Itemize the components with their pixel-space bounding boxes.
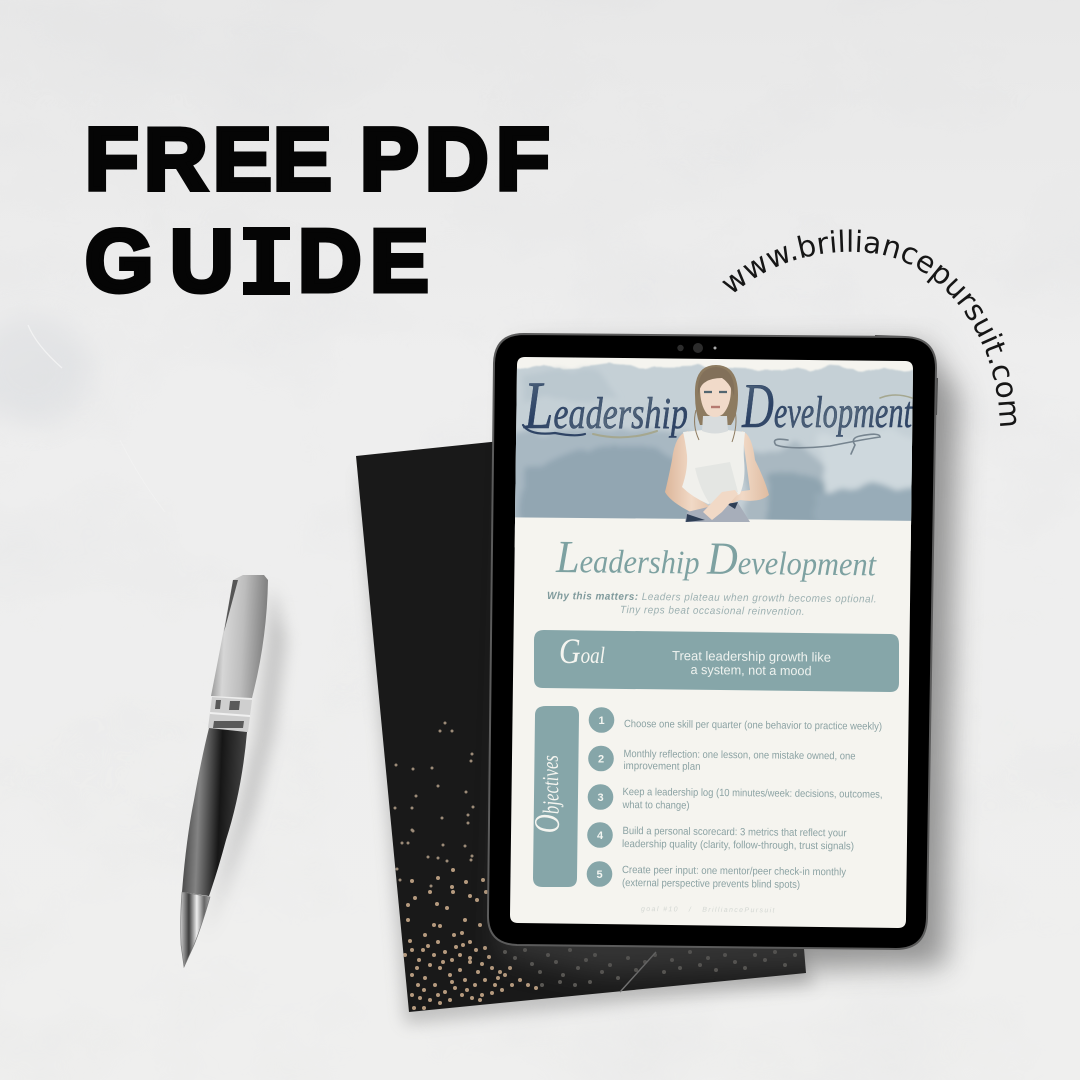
goal text: a system, not a mood xyxy=(690,662,812,678)
hair top xyxy=(698,367,734,396)
header title: Leadership: Leadership xyxy=(523,367,688,443)
curved website url: www.brilliancepursuit.com xyxy=(722,229,1016,426)
main title: Leadership Development xyxy=(555,531,877,585)
hair wisps xyxy=(695,410,736,442)
pen barrel xyxy=(182,728,247,896)
header flourishes xyxy=(523,395,912,454)
eyes and lips xyxy=(704,391,727,393)
why this matters text xyxy=(548,592,876,616)
black notebook xyxy=(356,414,815,1024)
objective 4 xyxy=(587,822,854,852)
goal label: Goal xyxy=(559,631,605,671)
goal text: Treat leadership growth like xyxy=(672,648,831,665)
tablet xyxy=(488,334,958,975)
objective 1: Choose one skill per quarter (one behavior to practice weekly) xyxy=(624,718,882,733)
objective 4: leadership quality (clarity, follow-through, trust signals) xyxy=(622,838,854,852)
hair back xyxy=(695,365,738,425)
goal text xyxy=(672,651,830,677)
objective 2: 2 xyxy=(598,754,604,766)
pen xyxy=(181,575,286,967)
tablet side buttons xyxy=(875,335,938,415)
illustration: woman xyxy=(665,365,769,522)
pen cap xyxy=(211,575,268,698)
objective 4: Build a personal scorecard: 3 metrics that reflect your xyxy=(622,825,847,839)
objectives panel: Objectives xyxy=(526,755,567,834)
pen nib xyxy=(181,892,210,967)
notebook shadow xyxy=(360,470,815,1024)
face xyxy=(700,375,731,417)
footer text: goal #10 / BrilliancePursuit xyxy=(641,906,776,914)
gold speckles xyxy=(395,723,795,1008)
skirt xyxy=(685,503,750,522)
heading: FREE PDF GUIDE: FREE PDF xyxy=(85,110,550,208)
pen rings xyxy=(208,697,252,732)
why this matters text: Tiny reps beat occasional reinvention. xyxy=(620,604,805,618)
goal banner xyxy=(534,630,899,692)
arms xyxy=(665,431,709,512)
objective 1: 1 xyxy=(598,715,605,727)
notebook fold line xyxy=(620,952,656,992)
hands xyxy=(703,490,738,520)
watercolor header xyxy=(500,364,930,551)
tablet screen xyxy=(500,350,930,940)
tablet shadow xyxy=(500,345,958,975)
objective 3: Keep a leadership log (10 minutes/week: decisions, outcomes, xyxy=(622,786,883,801)
sleeveless top xyxy=(682,430,745,504)
heading: FREE PDF GUIDE xyxy=(85,110,550,310)
objective 1 xyxy=(589,707,882,733)
objective 5: (external perspective prevents blind spots) xyxy=(622,877,800,891)
notebook cover xyxy=(356,414,806,1012)
objective 2: Monthly reflection: one lesson, one mistake owned, one xyxy=(623,748,856,762)
objective 5: Create peer input: one mentor/peer check-in monthly xyxy=(622,864,847,878)
objective 3 xyxy=(588,784,883,812)
tablet camera xyxy=(677,343,716,353)
heading: FREE PDF GUIDE: GUIDE xyxy=(85,211,429,310)
header title: Development: Development xyxy=(741,370,913,441)
pen shadow xyxy=(205,585,286,940)
objective 5: 5 xyxy=(596,869,603,881)
objective 2 xyxy=(588,746,856,773)
objective 3: what to change) xyxy=(622,799,690,812)
objectives panel xyxy=(533,706,579,887)
objective 5 xyxy=(587,861,847,891)
objective 4: 4 xyxy=(597,830,604,842)
objective 2: improvement plan xyxy=(623,760,701,773)
objective 3: 3 xyxy=(597,792,604,804)
neck and collar xyxy=(702,416,728,434)
why this matters text: Why this matters: Leaders plateau when growth becomes optional. xyxy=(547,590,877,605)
tablet body xyxy=(488,334,936,949)
